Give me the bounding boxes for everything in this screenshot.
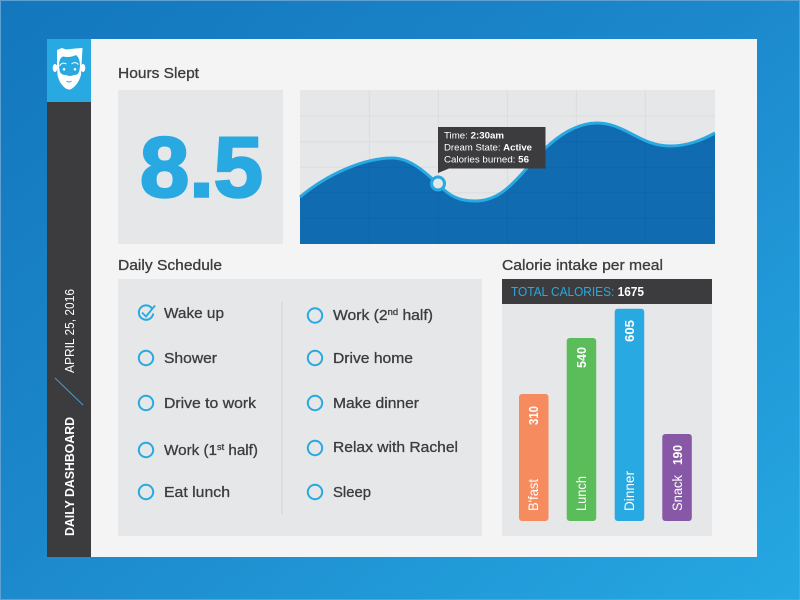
tooltip: Time: 2:30am — [444, 130, 504, 142]
area fill — [300, 123, 715, 244]
dashboard panel — [47, 39, 757, 557]
bar: lunch: 540 — [574, 347, 589, 368]
total calories header: TOTAL CALORIES: 1675 — [511, 284, 644, 299]
big number: 8.5 — [140, 120, 263, 216]
item: work first half: st — [217, 442, 225, 452]
total calories header — [502, 279, 712, 304]
bar: dinner: Dinner — [621, 471, 637, 511]
sidebar — [47, 102, 91, 557]
item: wake up: Wake up — [164, 305, 224, 322]
bar: dinner: 605 — [622, 320, 637, 342]
tooltip — [438, 127, 546, 173]
item: drive home: Drive home — [333, 350, 413, 367]
tooltip: Dream State: Active — [444, 142, 532, 154]
heading: daily schedule: Daily Schedule — [118, 257, 222, 274]
item: work first half: Work (1 — [164, 442, 216, 459]
bar: snack — [662, 434, 692, 521]
item: eat lunch — [139, 484, 230, 501]
avatar tile — [47, 39, 91, 102]
item: sleep: Sleep — [333, 484, 371, 501]
item: work first half: half) — [224, 442, 258, 459]
item: shower: Shower — [164, 350, 217, 367]
bar: breakfast: B'fast — [525, 479, 541, 511]
heading: hours slept: Hours Slept — [118, 65, 200, 82]
line — [300, 123, 715, 201]
panel: daily schedule — [118, 279, 482, 536]
item: work second half — [308, 307, 433, 324]
item: work second half: Work (2 — [333, 307, 385, 324]
bar: breakfast: 310 — [526, 406, 541, 425]
bar: breakfast — [519, 394, 548, 521]
bar: dinner — [615, 309, 644, 521]
bar: lunch: Lunch — [573, 476, 589, 511]
sidebar divider line — [55, 378, 83, 405]
bar: lunch — [567, 338, 596, 521]
area chart: sleep — [300, 90, 715, 244]
item: work first half — [139, 442, 258, 459]
item: sleep — [308, 484, 371, 501]
sidebar title: daily dashboard: DAILY DASHBOARD — [62, 417, 77, 536]
item: relax with rachel: Relax with Rachel — [333, 439, 458, 456]
bar: snack: 190 — [670, 445, 685, 465]
item: wake up — [139, 305, 224, 322]
tooltip: Calories burned: 56 — [444, 154, 529, 166]
panel: hours slept value — [118, 90, 283, 244]
panel: calorie chart — [502, 279, 712, 536]
item: work second half: half) — [398, 307, 433, 324]
item: work second half: nd — [388, 307, 398, 317]
item: shower — [139, 350, 217, 367]
item: eat lunch: Eat lunch — [164, 484, 230, 501]
item: make dinner: Make dinner — [333, 395, 419, 412]
heading: calorie intake: Calorie intake per meal — [502, 257, 663, 274]
sidebar date: APRIL 25, 2016 — [62, 289, 77, 373]
icon: face — [53, 48, 85, 90]
bar: snack: Snack — [669, 474, 685, 511]
data point marker — [432, 177, 444, 190]
item: drive to work: Drive to work — [164, 395, 257, 412]
